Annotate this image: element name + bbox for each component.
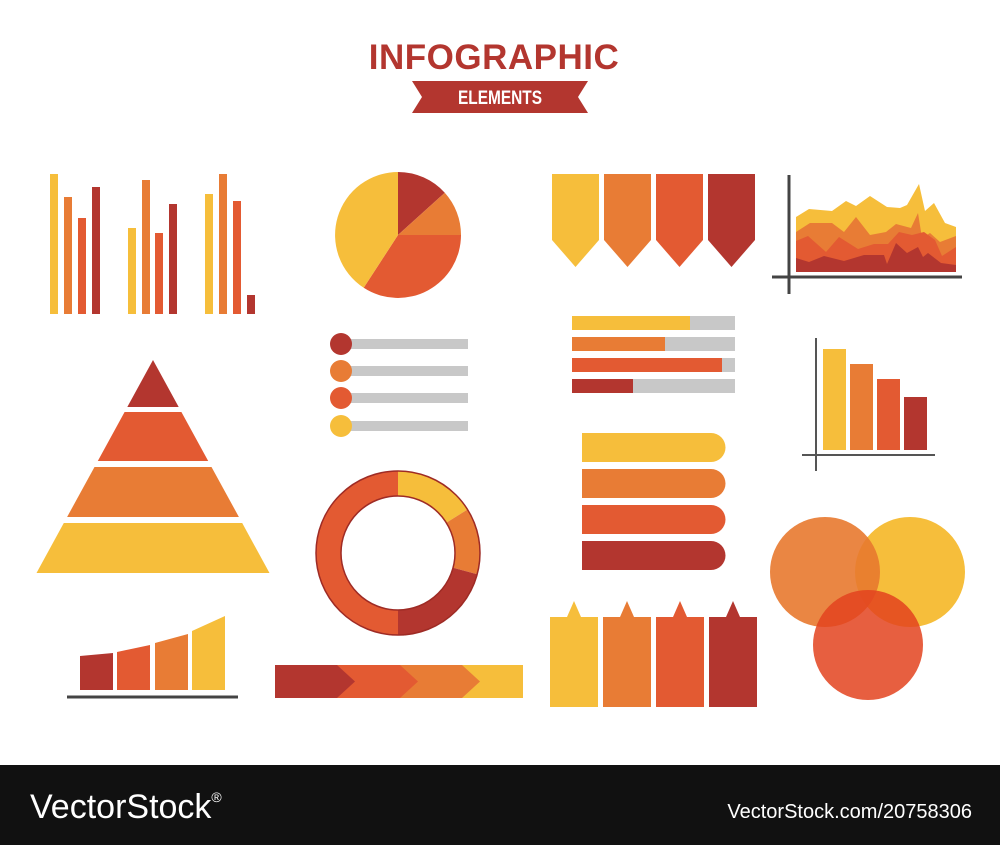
list with circle bullets	[330, 333, 468, 437]
growth steps chart	[67, 616, 238, 697]
bar chart groups	[50, 174, 255, 314]
bar chart with axes	[802, 338, 935, 471]
area chart	[772, 175, 962, 294]
ribbon: elements: ELEMENTS	[458, 88, 542, 109]
donut chart	[316, 471, 480, 635]
rounded tabs	[582, 433, 726, 570]
pyramid	[36, 360, 270, 573]
pie chart	[335, 172, 461, 298]
footer: VectorStock	[30, 788, 211, 826]
title: INFOGRAPHIC	[369, 38, 619, 77]
title	[369, 38, 619, 113]
arrow process bar	[275, 665, 523, 698]
venn diagram	[770, 517, 965, 700]
footer	[0, 765, 1000, 845]
footer: ®	[211, 789, 222, 805]
ribbon: elements	[412, 81, 588, 113]
footer: VectorStock.com/20758306	[727, 801, 972, 823]
progress bars	[572, 316, 735, 393]
callout boxes	[550, 601, 757, 707]
pennant banners	[552, 174, 755, 267]
